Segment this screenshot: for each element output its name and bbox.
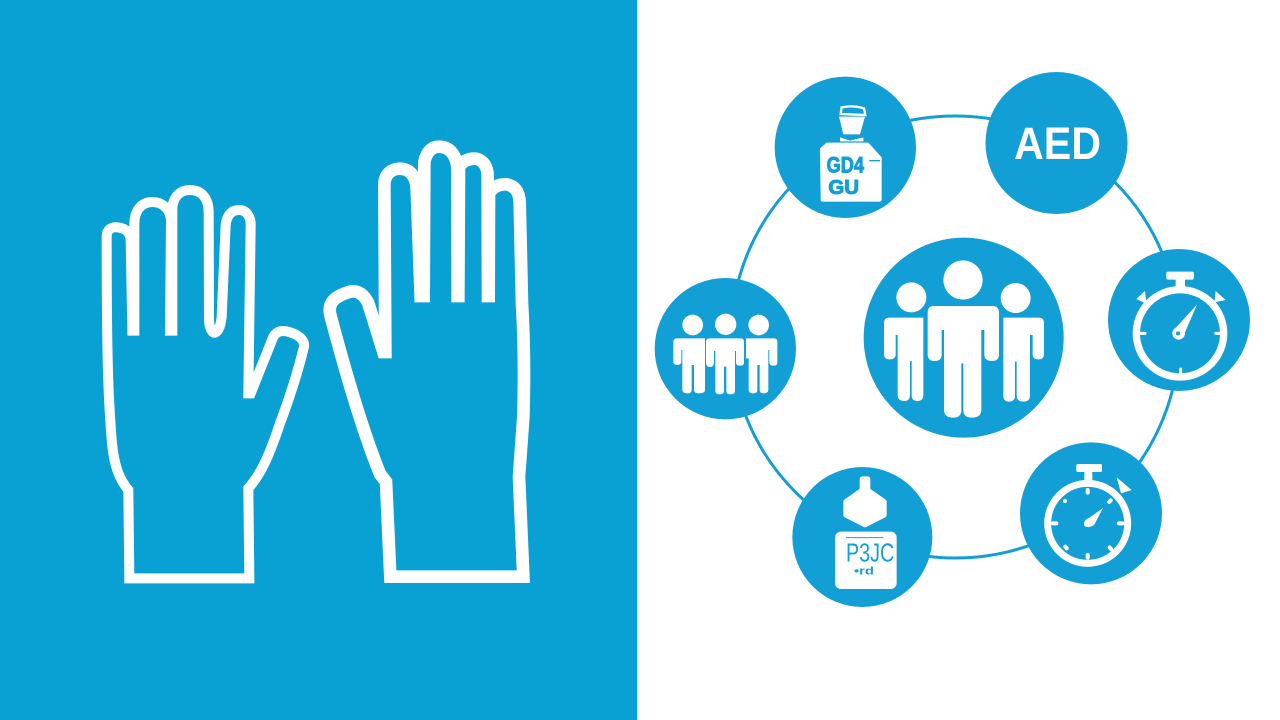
icon: supply box with cup: GD4 — [827, 152, 865, 177]
icon: right raised hand outline — [330, 147, 524, 577]
icon: supply box with cup — [775, 77, 916, 218]
icon: bottle and labelled container — [792, 467, 932, 607]
icon: bottle and labelled container: •rd — [854, 565, 874, 577]
connecting ring — [731, 116, 1179, 558]
icon: central group of three people — [864, 238, 1064, 438]
icon: stopwatch with tick marks — [1020, 442, 1162, 584]
icon: team of three people — [655, 278, 796, 419]
icon: left raised hand outline — [107, 190, 304, 578]
panel: blue hands background — [0, 0, 637, 720]
icon: AED badge: AED — [1014, 118, 1101, 169]
icon: bottle and labelled container: P3JC — [846, 538, 894, 568]
icon: supply box with cup: GU — [828, 177, 859, 199]
icon: stopwatch with two side buttons — [1108, 249, 1250, 391]
icon: AED badge — [986, 72, 1128, 214]
